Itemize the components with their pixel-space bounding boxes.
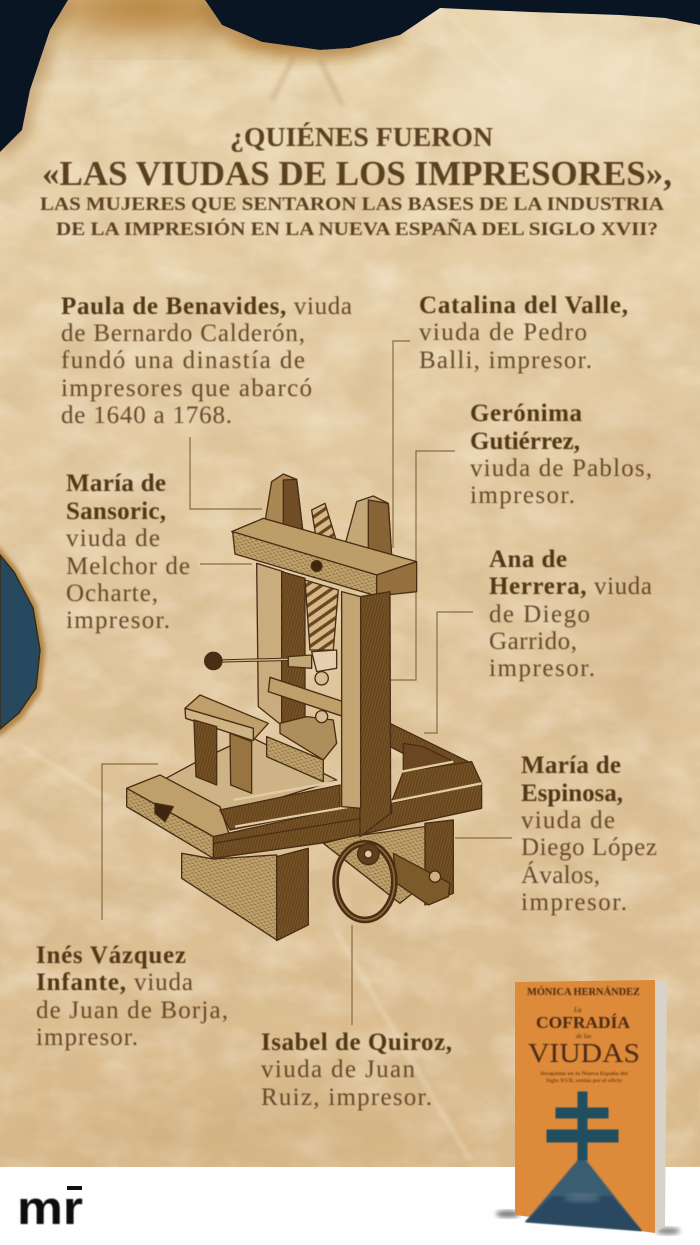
left post — [257, 563, 283, 727]
text block: Catalina del Valle: viuda de Pedro — [419, 319, 587, 346]
text block: María de Espinosa: Ávalos, — [521, 861, 600, 889]
text block: Gerónima Gutiérrez: impresor. — [470, 482, 575, 509]
tympan frame — [185, 695, 268, 740]
rear caps — [263, 474, 303, 535]
heading line 1: ¿QUIÉNES FUERON — [230, 122, 494, 152]
text block: Ana de Herrera: impresor. — [489, 655, 595, 682]
text block: Paula de Benavides: de Bernardo Calderón, — [61, 320, 305, 347]
text block: María de Sansoric — [66, 470, 190, 634]
text block: Paula de Benavides: Paula de Benavides, viuda — [61, 293, 352, 320]
text block: María de Sansoric: Ocharte, — [66, 580, 158, 607]
text block: Gerónima Gutiérrez — [470, 400, 652, 509]
book cover text: Siglo XVII, unidas por el oficio — [546, 1077, 622, 1084]
heading line 3: LAS MUJERES QUE SENTARON LAS BASES DE LA INDUSTRIA — [40, 194, 664, 215]
book cover text: de las — [576, 1033, 592, 1040]
text block: Isabel de Quiroz — [261, 1029, 452, 1111]
text block: María de Sansoric: impresor. — [66, 607, 170, 634]
text block: María de Espinosa: Diego López — [521, 834, 657, 861]
book cover text: VIUDAS — [528, 1038, 640, 1068]
screw — [305, 580, 338, 650]
book cover text: La — [573, 1006, 582, 1014]
text block: Catalina del Valle: Balli, impresor. — [419, 347, 592, 374]
text block: Gerónima Gutiérrez: Gerónima — [470, 400, 582, 427]
text block: Inés Vázquez Infante: impresor. — [36, 1024, 138, 1051]
heading line 2: «LAS VIUDAS DE LOS IMPRESORES», — [42, 154, 672, 193]
base — [127, 775, 230, 837]
text block: María de Sansoric: viuda de — [66, 525, 160, 552]
text block: Ana de Herrera: Ana de — [489, 546, 567, 573]
text block: Ana de Herrera: Herrera, viuda — [489, 573, 652, 600]
text block: María de Espinosa: impresor. — [521, 889, 627, 916]
top beam — [232, 518, 417, 575]
illustration: printing press — [127, 474, 482, 941]
right post — [360, 592, 391, 837]
text block: Isabel de Quiroz: Ruiz, impresor. — [261, 1084, 432, 1111]
book cover art: mountain — [525, 1155, 642, 1231]
text block: Inés Vázquez Infante — [36, 942, 228, 1051]
text block: Isabel de Quiroz: Isabel de Quiroz, — [261, 1029, 452, 1056]
logo: mr: mr — [17, 1181, 83, 1234]
text block: María de Espinosa — [521, 752, 657, 916]
text block: Inés Vázquez Infante: Infante, viuda — [36, 969, 193, 996]
text block: María de Sansoric: Sansoric, — [66, 498, 166, 525]
text block: Inés Vázquez Infante: Inés Vázquez — [36, 942, 186, 969]
text block: María de Sansoric: María de — [66, 470, 166, 497]
text block: Paula de Benavides: de 1640 a 1768. — [61, 402, 232, 429]
iron ring — [336, 843, 394, 920]
text block: María de Espinosa: Espinosa, — [521, 780, 623, 807]
book cover text — [527, 986, 640, 1084]
burn hole: left edge — [0, 553, 42, 732]
text block: Gerónima Gutiérrez: viuda de Pablos, — [470, 455, 652, 482]
bottom white band — [0, 1167, 700, 1245]
text block: Ana de Herrera — [489, 546, 652, 682]
text block: Ana de Herrera: Garrido, — [489, 628, 577, 655]
book cover art: cross — [547, 1092, 618, 1160]
title — [40, 122, 672, 240]
book cover text: MÓNICA HERNÁNDEZ — [527, 986, 640, 998]
rear legs and crossbeam — [425, 820, 453, 905]
bed and table — [157, 737, 337, 813]
text block: Ana de Herrera: de Diego — [489, 601, 590, 628]
leader lines — [102, 341, 512, 1025]
text block: Paula de Benavides — [61, 293, 352, 429]
background: dark night — [0, 0, 700, 300]
text block: Paula de Benavides: fundó una dinastía de — [61, 347, 305, 374]
book cover text: Atrapadas en la Nueva España del — [540, 1071, 629, 1077]
text block: Catalina del Valle — [419, 292, 628, 374]
text block: Gerónima Gutiérrez: Gutiérrez, — [470, 428, 580, 455]
text block: Isabel de Quiroz: viuda de Juan — [261, 1056, 416, 1083]
heading line 4: DE LA IMPRESIÓN EN LA NUEVA ESPAÑA DEL SIGLO XVII? — [56, 218, 658, 240]
platen — [268, 677, 353, 719]
book: La cofradía de las viudas — [496, 980, 680, 1234]
book cover text: COFRADÍA — [536, 1013, 631, 1032]
text block: María de Espinosa: María de — [521, 752, 621, 779]
text block: María de Sansoric: Melchor de — [66, 553, 190, 580]
text block: Inés Vázquez Infante: de Juan de Borja, — [36, 997, 228, 1024]
text block: María de Espinosa: viuda de — [521, 807, 615, 834]
bar handle — [220, 659, 288, 661]
front leg — [182, 853, 277, 940]
rear frame — [390, 723, 472, 788]
text block: Catalina del Valle: Catalina del Valle, — [419, 292, 628, 319]
text block: Paula de Benavides: impresores que abarcó — [61, 375, 312, 402]
